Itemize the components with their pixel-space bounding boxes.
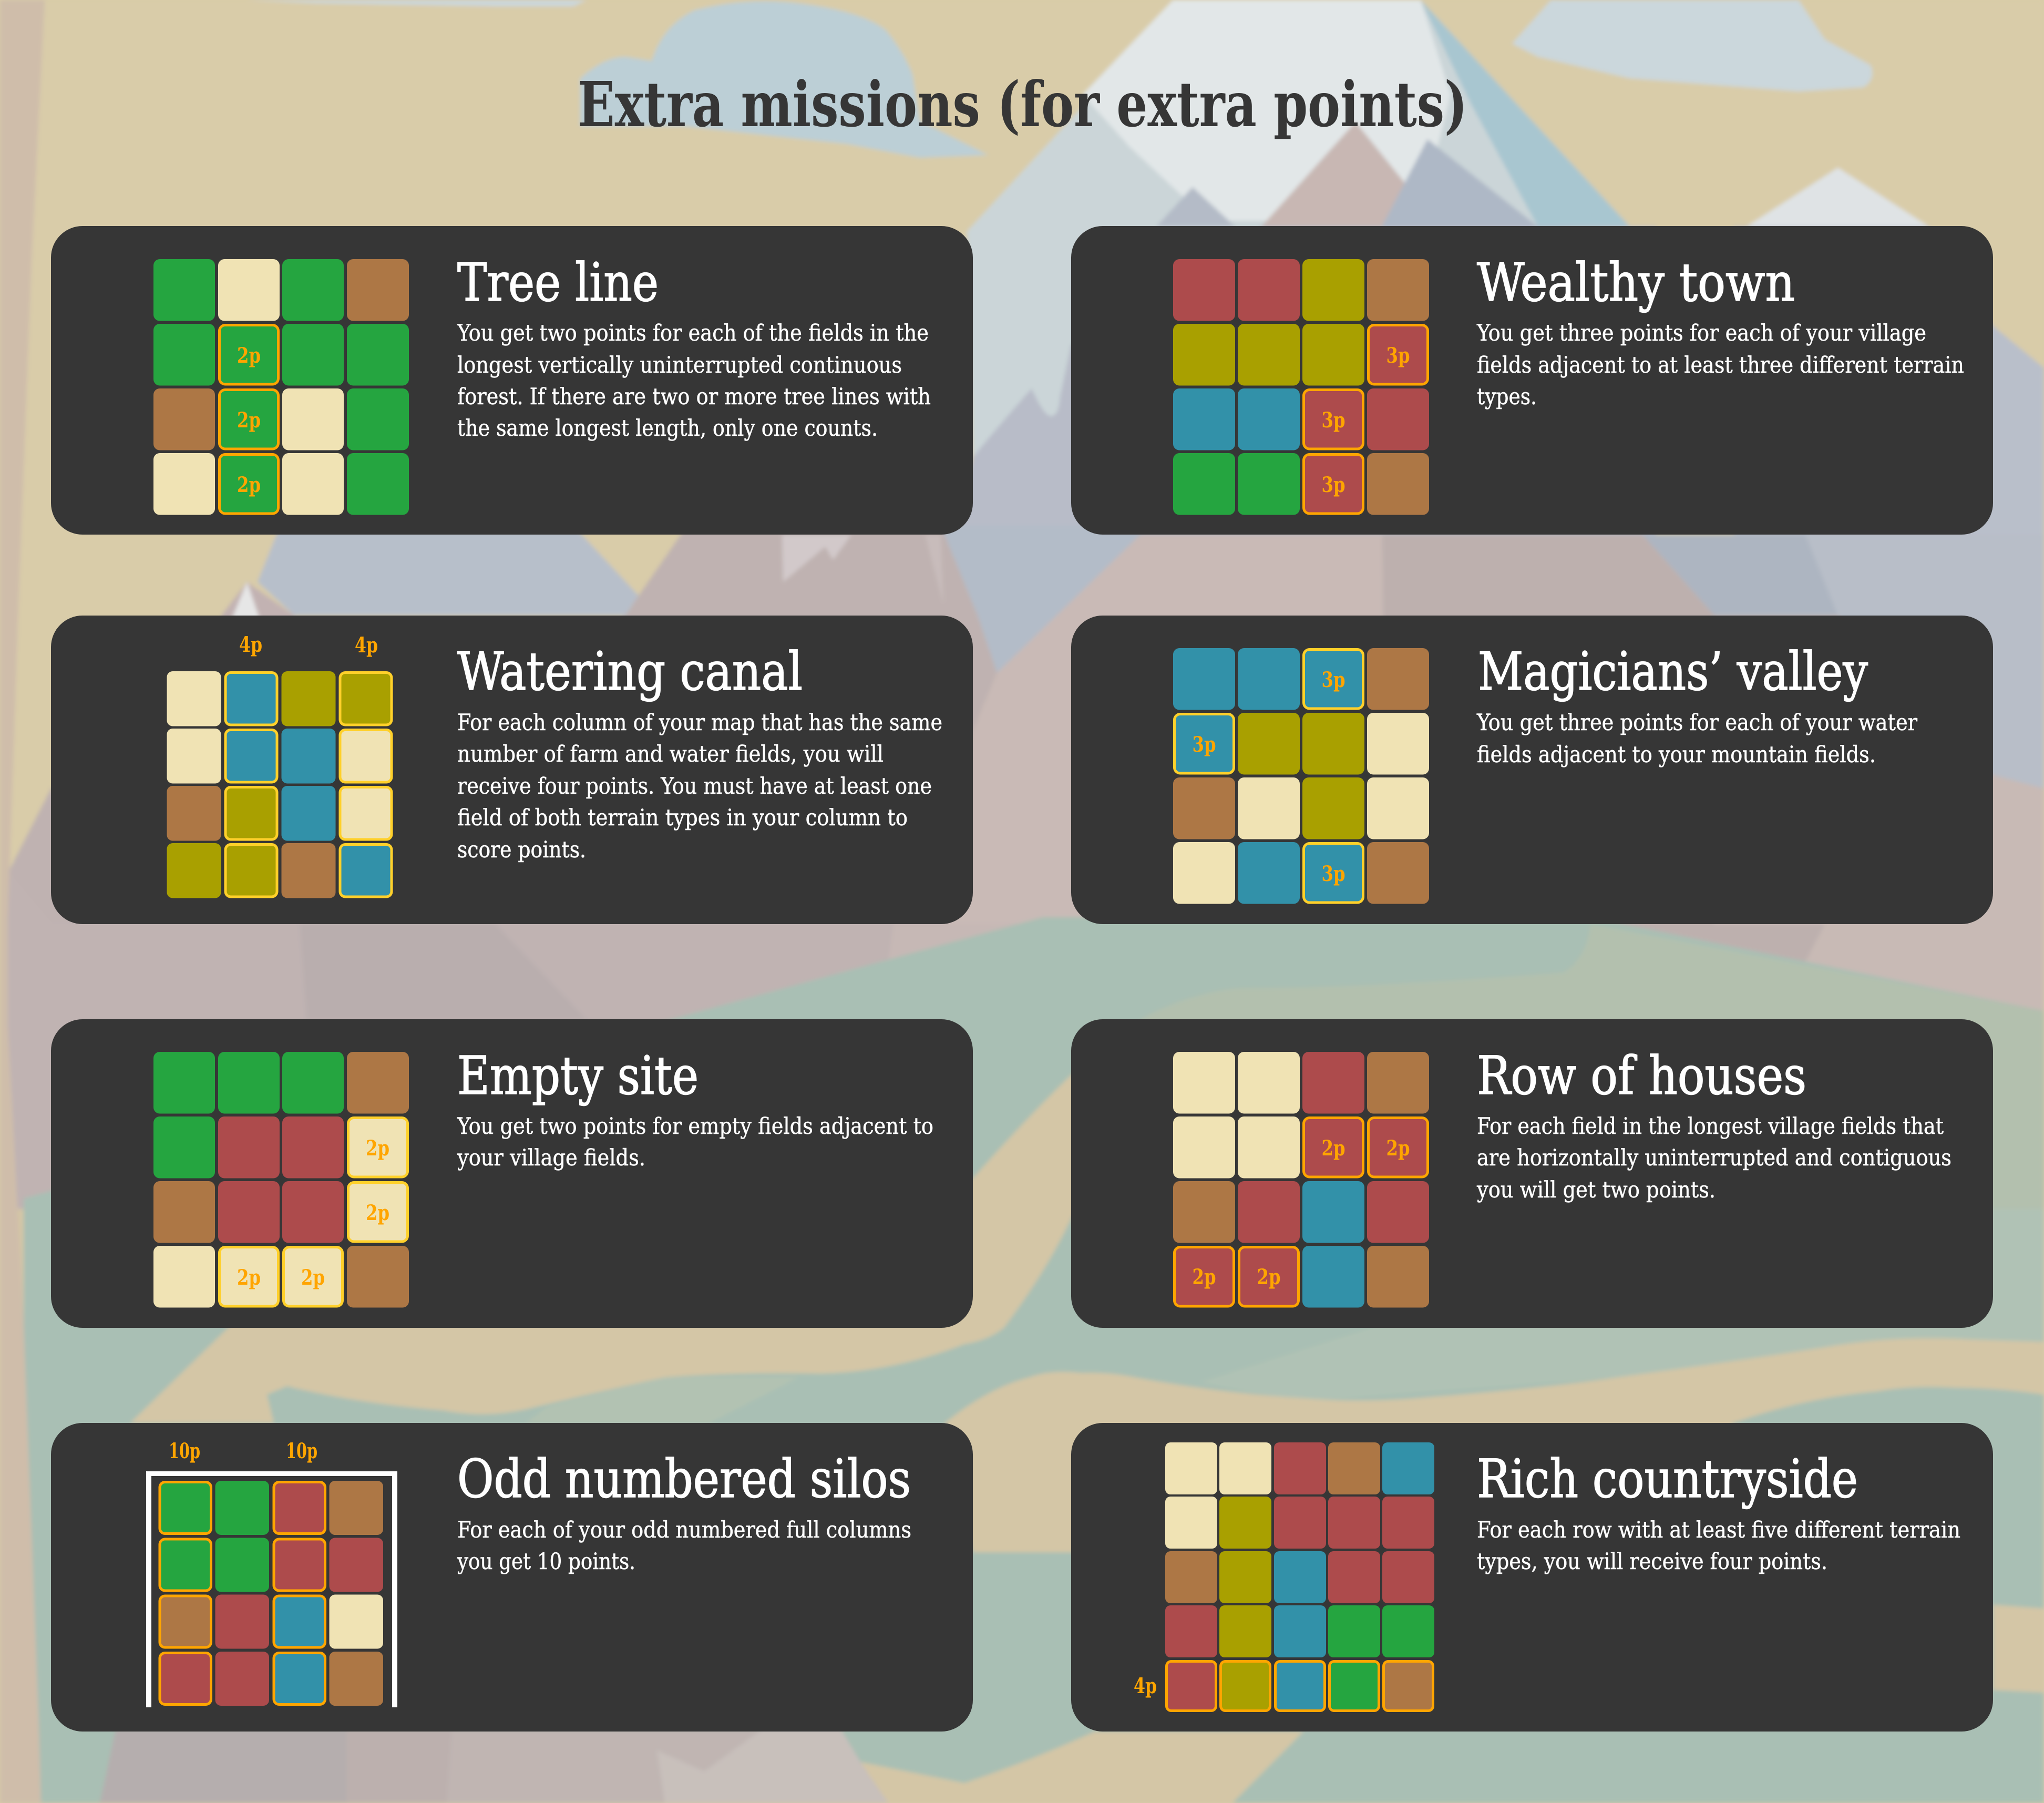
description: Row of houses: you will get two points. — [1476, 1177, 1716, 1203]
heading: Wealthy town: Wealthy town — [1477, 252, 1795, 313]
grid: Rich countryside map — [1165, 1442, 1434, 1710]
description: Tree line: longest vertically uninterrupted continuous — [457, 352, 902, 378]
grid: Empty site map: 2p — [366, 1136, 389, 1161]
heading: Watering canal: Watering canal — [457, 641, 803, 702]
grid: Row of houses map: 2p — [1192, 1265, 1216, 1289]
description: Rich countryside — [1477, 1517, 1960, 1575]
description: Odd numbered silos: you get 10 points. — [457, 1549, 635, 1575]
grid: Row of houses map — [1173, 1052, 1429, 1308]
grid: Row of houses map: 2p — [1321, 1136, 1345, 1161]
panel: Odd numbered silos — [51, 1423, 973, 1732]
description: Watering canal — [457, 710, 942, 863]
panel: Rich countryside — [1071, 1423, 1993, 1732]
grid: Empty site map: 2p — [237, 1265, 261, 1290]
description: Empty site — [457, 1113, 933, 1171]
description: Rich countryside: For each row with at least five different terrain — [1477, 1517, 1960, 1543]
description: Magicians' valley — [1476, 710, 1917, 768]
scoring labels: Watering canal columns — [239, 632, 378, 658]
grid: Odd numbered silos map — [160, 1481, 383, 1706]
panel: Row of houses — [1071, 1019, 1993, 1328]
scoring labels: Watering canal columns: 4p — [239, 632, 262, 657]
silo frame — [146, 1471, 397, 1707]
description: Odd numbered silos: For each of your odd numbered full columns — [457, 1517, 911, 1543]
grid: Empty site map: 2p — [366, 1201, 389, 1225]
description: Empty site: your village fields. — [457, 1145, 645, 1171]
grid: Row of houses map: 2p — [1257, 1265, 1280, 1289]
description: Wealthy town: types. — [1477, 384, 1537, 410]
description: Tree line: the same longest length, only one counts. — [457, 415, 878, 442]
description: Odd numbered silos — [457, 1517, 911, 1575]
panel: Empty site — [51, 1019, 973, 1328]
description: Row of houses: For each field in the longest village fields that — [1477, 1113, 1944, 1140]
description: Tree line — [457, 320, 931, 442]
panel: Watering canal — [51, 616, 973, 924]
grid: Empty site map — [153, 1052, 409, 1308]
grid: Wealthy town map — [1173, 259, 1429, 515]
description: Wealthy town: fields adjacent to at least three different terrain — [1477, 352, 1964, 378]
scoring labels: Odd numbered silos columns — [169, 1439, 317, 1463]
description: Watering canal: receive four points. You must have at least one — [457, 773, 932, 800]
description: Rich countryside: types, you will receive four points. — [1477, 1549, 1827, 1575]
scoring label: Rich countryside row: 4p — [1134, 1674, 1157, 1698]
description: Watering canal: field of both terrain types in your column to — [457, 805, 908, 831]
heading: Empty site: Empty site — [457, 1045, 699, 1107]
scoring labels: Odd numbered silos columns: 10p — [286, 1439, 317, 1463]
grid: Wealthy town map: 3p — [1386, 343, 1410, 368]
grid: Magicians' valley map: 3p — [1321, 862, 1345, 886]
description: Magicians' valley: fields adjacent to your mountain fields. — [1477, 742, 1876, 768]
description: Tree line: forest. If there are two or more tree lines with — [457, 384, 931, 410]
panel: Magicians' valley — [1071, 616, 1993, 924]
grid: Magicians' valley map — [1173, 648, 1429, 904]
description: Magicians' valley: You get three points for each of your water — [1476, 710, 1917, 736]
grid: Tree line map: 2p — [237, 343, 261, 368]
heading: Rich countryside: Rich countryside — [1477, 1448, 1858, 1510]
description: Empty site: You get two points for empty fields adjacent to — [457, 1113, 933, 1140]
grid: Wealthy town map: 3p — [1321, 408, 1345, 433]
heading: Odd numbered silos: Odd numbered silos — [457, 1448, 911, 1510]
grid: Tree line map: 2p — [237, 408, 261, 433]
heading: Row of houses: Row of houses — [1477, 1045, 1806, 1107]
description: Wealthy town: You get three points for each of your village — [1476, 320, 1926, 346]
grid: Empty site map: 2p — [301, 1265, 325, 1290]
description: Watering canal: For each column of your map that has the same — [457, 710, 942, 736]
heading: Tree line: Tree line — [457, 252, 659, 313]
grid: Watering canal map — [167, 671, 392, 898]
heading: Magicians' valley: Magicians’ valley — [1478, 641, 1868, 702]
grid: Row of houses map: 2p — [1386, 1136, 1410, 1161]
description: Row of houses — [1476, 1113, 1951, 1203]
grid: Magicians' valley map: 3p — [1192, 732, 1216, 757]
description: Wealthy town — [1476, 320, 1964, 410]
grid: Tree line map: 2p — [237, 473, 261, 497]
scoring labels: Odd numbered silos columns: 10p — [169, 1439, 200, 1463]
grid: Wealthy town map: 3p — [1321, 473, 1345, 497]
panel: Wealthy town — [1071, 226, 1993, 535]
grid: Magicians' valley map: 3p — [1321, 668, 1345, 692]
description: Watering canal: number of farm and water fields, you will — [457, 741, 884, 767]
panel: Tree line — [51, 226, 973, 535]
grid: Tree line map — [153, 259, 409, 515]
description: Watering canal: score points. — [457, 837, 586, 863]
scoring labels: Watering canal columns: 4p — [355, 633, 378, 658]
title: Extra missions (for extra points) — [578, 68, 1467, 141]
description: Row of houses: are horizontally uninterrupted and contiguous — [1477, 1145, 1951, 1171]
description: Tree line: You get two points for each of the fields in the — [457, 320, 929, 346]
